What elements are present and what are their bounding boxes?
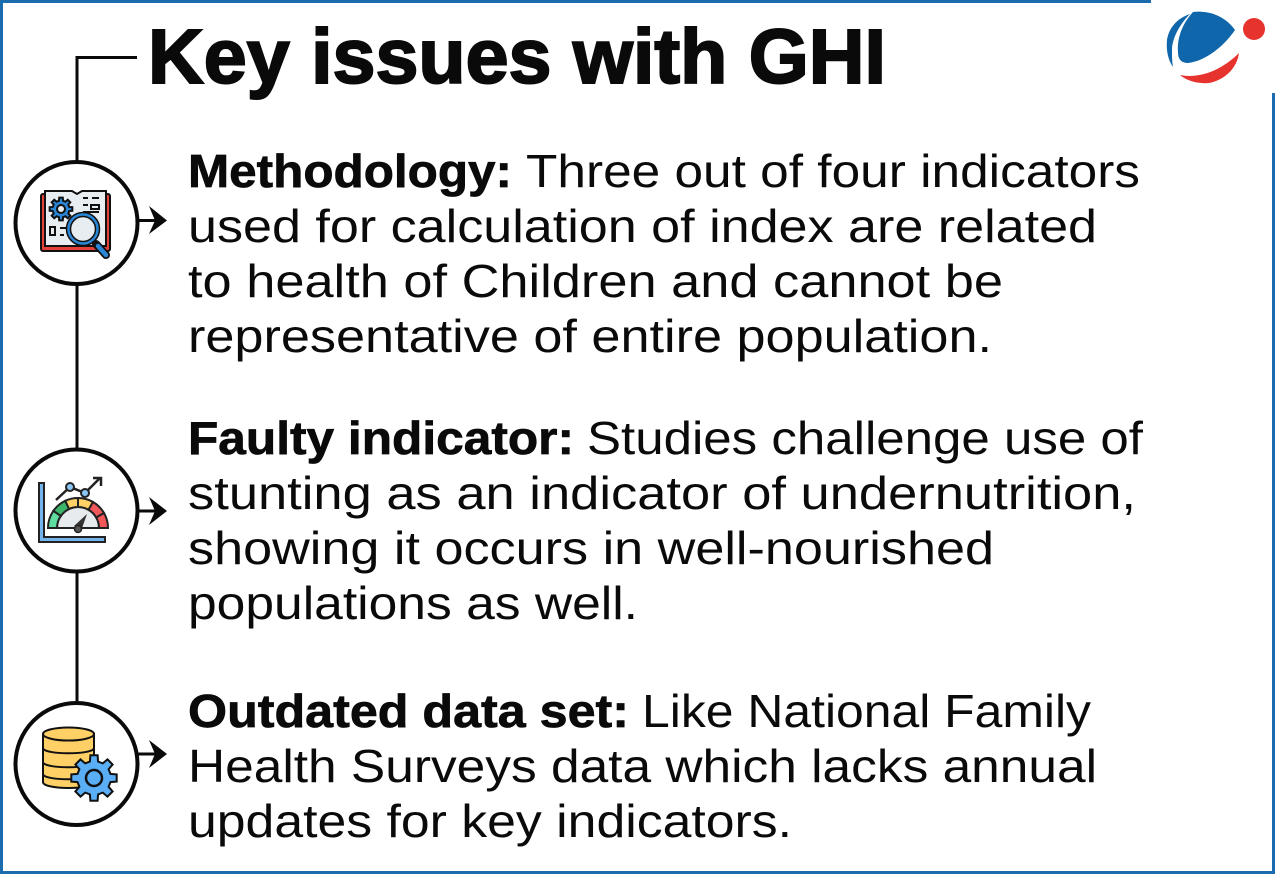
text block: outdated data set: Outdated data set: [188, 685, 629, 737]
text block: outdated data set: updates for key indicators. [188, 795, 792, 847]
logo [1167, 12, 1265, 83]
icon: book with magnifier [16, 162, 138, 284]
text block: faulty indicator: Faulty indicator: [188, 412, 574, 464]
title connector [77, 58, 137, 702]
text block: methodology: representative of entire population. [188, 310, 992, 362]
text block: methodology: Three out of four indicators [526, 145, 1140, 197]
arrow [138, 740, 167, 768]
arrow [138, 497, 167, 525]
text block: outdated data set: Like National Family [642, 685, 1091, 737]
text block: faulty indicator: Studies challenge use of [587, 412, 1143, 464]
text block: outdated data set [188, 685, 1097, 847]
text block: faulty indicator: stunting as an indicator of undernutrition, [188, 467, 1136, 519]
icon: gauge chart [16, 450, 138, 572]
arrow [138, 206, 167, 234]
panel: faulty indicator [16, 412, 1143, 629]
text block: faulty indicator: populations as well. [188, 577, 638, 629]
text block: methodology: to health of Children and cannot be [188, 255, 1003, 307]
text block: methodology: Methodology: [188, 145, 512, 197]
text block: faulty indicator [188, 412, 1143, 629]
text block: methodology [188, 145, 1140, 362]
text block: outdated data set: Health Surveys data which lacks annual [188, 740, 1097, 792]
icon: database with gear [16, 703, 138, 825]
title: Key issues with GHI [148, 14, 886, 100]
text block: faulty indicator: showing it occurs in well-nourished [188, 522, 994, 574]
text block: methodology: used for calculation of index are related [188, 200, 1097, 252]
panel: methodology [16, 145, 1140, 362]
panel: outdated data set [16, 685, 1097, 847]
